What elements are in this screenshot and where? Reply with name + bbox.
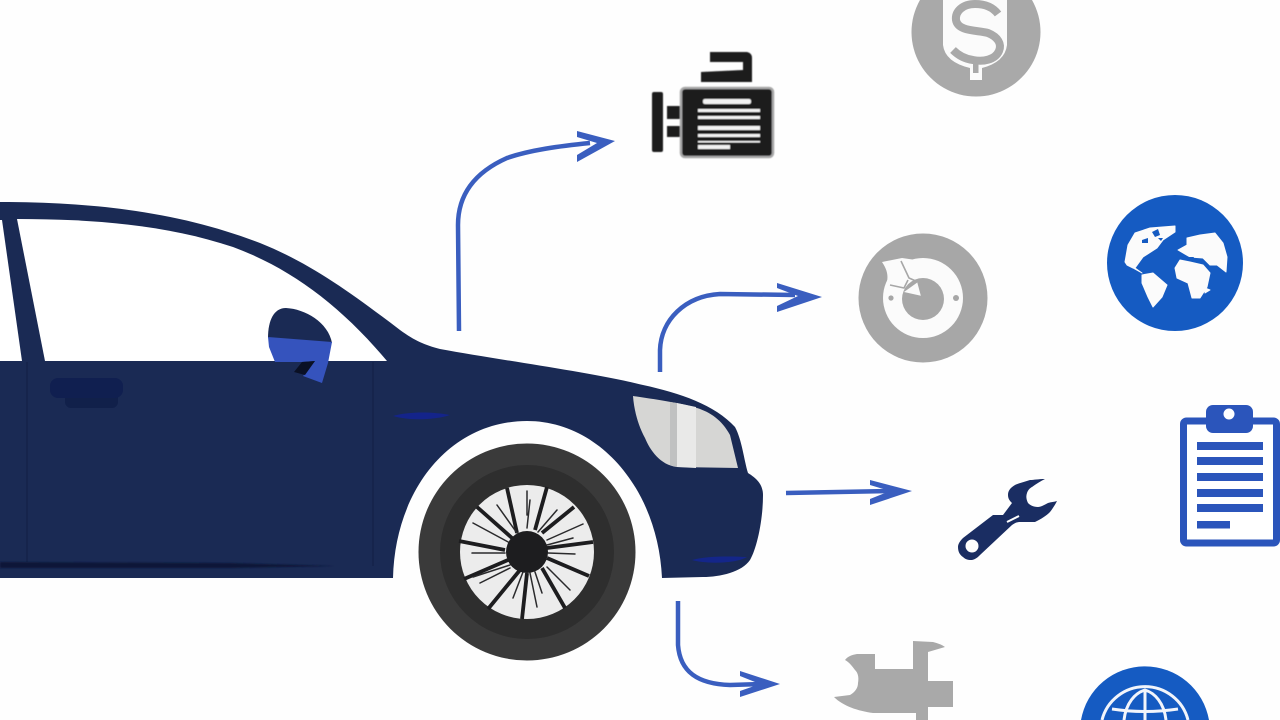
icon: wrench bbox=[958, 479, 1057, 560]
tyre bbox=[418, 444, 636, 660]
icon: engine bbox=[652, 52, 773, 157]
lower body shadow bbox=[0, 562, 335, 568]
rim bbox=[460, 485, 594, 619]
side mirror bbox=[268, 308, 332, 383]
icon: web globe bbox=[1081, 666, 1209, 720]
arrow: to brake bbox=[660, 283, 822, 372]
headlight bbox=[633, 396, 738, 468]
rear window bbox=[0, 220, 22, 361]
car body bbox=[0, 202, 763, 578]
hub bbox=[506, 531, 548, 573]
car bbox=[0, 202, 763, 578]
arrow: to wrench bbox=[786, 480, 912, 505]
arrow: to engine bbox=[458, 131, 615, 331]
door seams bbox=[27, 362, 373, 566]
icon: brake disc bbox=[858, 234, 988, 362]
side marker bbox=[393, 412, 450, 419]
icon: dollar coin bbox=[912, 0, 1040, 97]
front window bbox=[17, 219, 387, 361]
bumper marker bbox=[692, 556, 747, 563]
icon: clipboard bbox=[1184, 405, 1276, 543]
fine spoke lines bbox=[472, 491, 583, 607]
front wheel bbox=[418, 444, 636, 660]
arrow: to parts bbox=[678, 601, 780, 697]
door handle bbox=[50, 378, 123, 408]
icon: puzzle wrench bbox=[834, 641, 953, 720]
spokes bbox=[459, 487, 593, 619]
icon: globe map bbox=[1107, 195, 1243, 331]
